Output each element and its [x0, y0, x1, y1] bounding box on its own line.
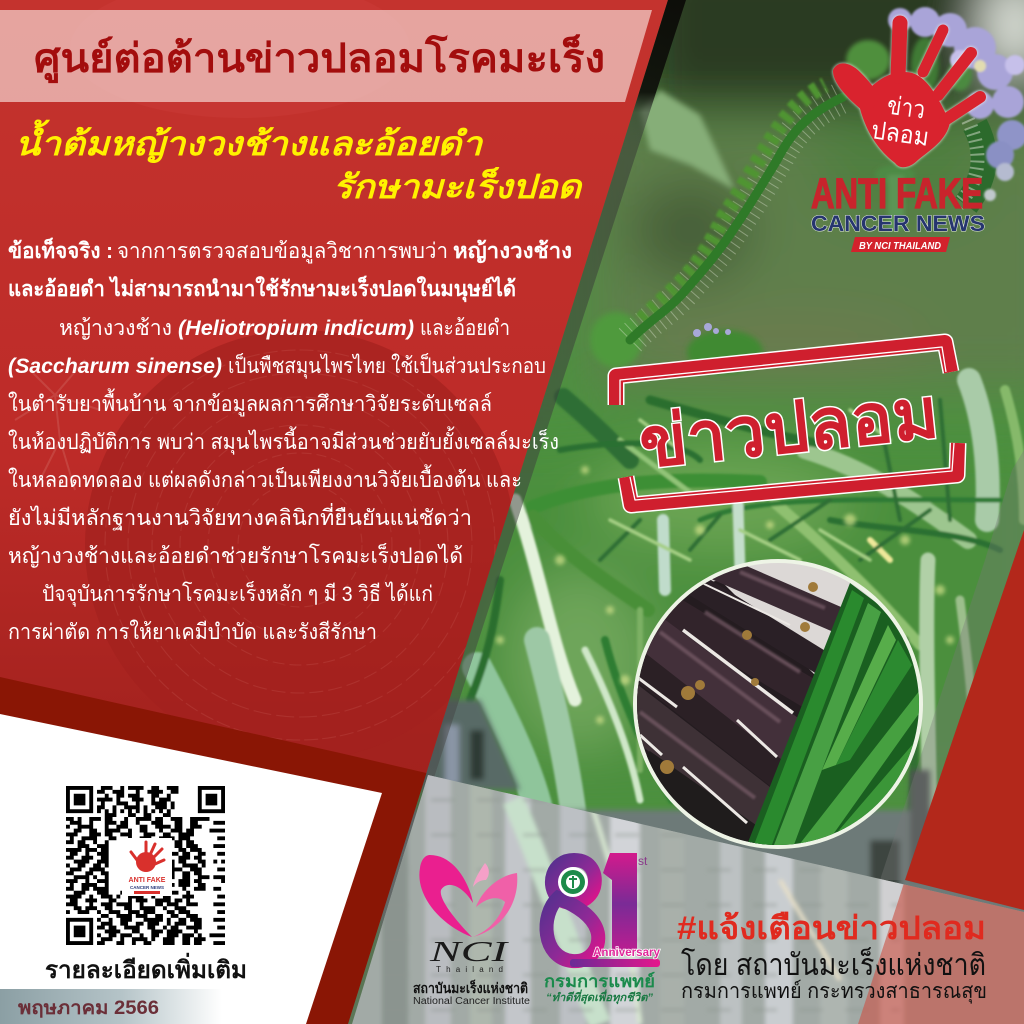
NCI logo: สถาบันมะเร็งแห่งชาติ [413, 979, 528, 996]
date strip: พฤษภาคม 2566 [18, 998, 159, 1019]
body text: และอ้อยดำ [420, 316, 510, 340]
hashtag and sponsor text: #แจ้งเตือนข่าวปลอม [677, 910, 986, 946]
body text: จากการตรวจสอบข้อมูลวิชาการพบว่า [117, 239, 448, 264]
body text: ในหลอดทดลอง แต่ผลดังกล่าวเป็นเพียงงานวิจัยเบื้องต้น และ [8, 464, 522, 492]
sugarcane translucent footer photo [350, 770, 1024, 1024]
body text: (Saccharum sinense) [8, 354, 222, 378]
subtitle: น้ำต้มหญ้างวงช้างและอ้อยดำ [15, 119, 484, 164]
hashtag and sponsor text: กรมการแพทย์ กระทรวงสาธารณสุข [681, 979, 987, 1004]
body text: ยังไม่มีหลักฐานงานวิจัยทางคลินิกที่ยืนยันแน่ชัดว่า [8, 503, 472, 531]
dark sugarcane base [380, 700, 1024, 1024]
body text: หญ้างวงช้าง [59, 316, 172, 340]
subtitle: รักษามะเร็งปอด [333, 166, 584, 205]
81st anniversary logo: st [638, 854, 648, 868]
highlights [640, 572, 825, 798]
body text: หญ้างวงช้างและอ้อยดำช่วยรักษาโรคมะเร็งปอดได้ [8, 541, 463, 568]
pale title band [0, 10, 652, 102]
81st anniversary logo: “ทำดีที่สุดเพื่อทุกชีวิต” [546, 989, 654, 1005]
stamp text: ข่าวปลอม [635, 374, 942, 483]
Anti Fake Cancer News logo [811, 23, 985, 252]
NCI logo: Thailand [436, 965, 503, 974]
body text: เป็นพืชสมุนไพรไทย ใช้เป็นส่วนประกอบ [228, 351, 546, 379]
body text: ข้อเท็จจริง : [8, 236, 113, 263]
QR code [66, 788, 225, 943]
by NCI Thailand ribbon: BY NCI THAILAND [859, 241, 941, 252]
plant stem and lilac flowers [630, 7, 1024, 340]
lilac flowers [888, 7, 1024, 201]
grass blades [470, 380, 1024, 860]
red corner panel right [905, 530, 1024, 910]
NCI logo: National Cancer Institute [413, 996, 530, 1007]
white QR panel [0, 714, 382, 1024]
green spike head above thumb [846, 37, 972, 230]
QR centre logo: ANTI FAKE [129, 877, 166, 884]
body text: ในตำรับยาพื้นบ้าน จากข้อมูลผลการศึกษาวิจัยระดับเซลล์ [8, 388, 492, 417]
fake news stamp [616, 342, 958, 505]
right edge modules [209, 823, 225, 943]
shadow strip along panel edge [348, 0, 686, 1024]
red hand icon: ปลอม [869, 116, 931, 152]
title: ศูนย์ต่อต้านข่าวปลอมโรคมะเร็ง [34, 33, 605, 83]
subtitle [15, 119, 584, 205]
big pale leaf behind stem [590, 90, 763, 374]
red hand icon [833, 23, 980, 167]
flower spike buds [630, 85, 843, 340]
QR centre logo: CANCER NEWS [130, 885, 164, 890]
body text: หญ้างวงช้าง [453, 239, 572, 264]
more details caption: รายละเอียดเพิ่มเติม [45, 952, 247, 984]
hashtag and sponsor text [677, 910, 987, 1004]
translucent strip beside right red panel [880, 450, 1024, 880]
body text: (Heliotropium indicum) [178, 316, 414, 340]
body text: ปัจจุบันการรักษาโรคมะเร็งหลัก ๆ มี 3 วิธี ได้แก่ [42, 579, 433, 607]
body text: ในห้องปฏิบัติการ พบว่า สมุนไพรนี้อาจมีส่วนช่วยยับยั้งเซลล์มะเร็ง [8, 426, 559, 455]
small lilac buds lower head [693, 323, 731, 337]
81st anniversary logo [544, 853, 660, 1005]
dark lower band [0, 677, 426, 1024]
Anti Fake Cancer News logo: CANCER NEWS [811, 211, 985, 236]
red cell panel [0, 0, 686, 1024]
body text: และอ้อยดำ ไม่สามารถนำมาใช้รักษามะเร็งปอดในมนุษย์ได้ [8, 274, 516, 303]
NCI logo [413, 855, 530, 1007]
QR centre logo [122, 838, 172, 896]
anniversary label: Anniversary [593, 945, 660, 959]
butterfly icon [419, 855, 517, 937]
81st anniversary logo: กรมการแพทย์ [544, 971, 655, 991]
date strip [0, 989, 222, 1024]
hashtag and sponsor text: โดย สถาบันมะเร็งแห่งชาติ [681, 946, 986, 982]
white gaps [637, 582, 793, 823]
red hand icon: ข่าว [885, 92, 927, 125]
NCI logo: NCI [428, 937, 510, 968]
body text: การผ่าตัด การให้ยาเคมีบำบัด และรังสีรักษา [8, 619, 377, 644]
yellow-green leaf speckle [496, 466, 954, 724]
body text [8, 236, 572, 644]
health department seal [558, 867, 588, 897]
sugarcane and leaf photo circle [633, 559, 923, 849]
by NCI Thailand ribbon [851, 237, 950, 252]
stamp brackets [616, 342, 958, 505]
